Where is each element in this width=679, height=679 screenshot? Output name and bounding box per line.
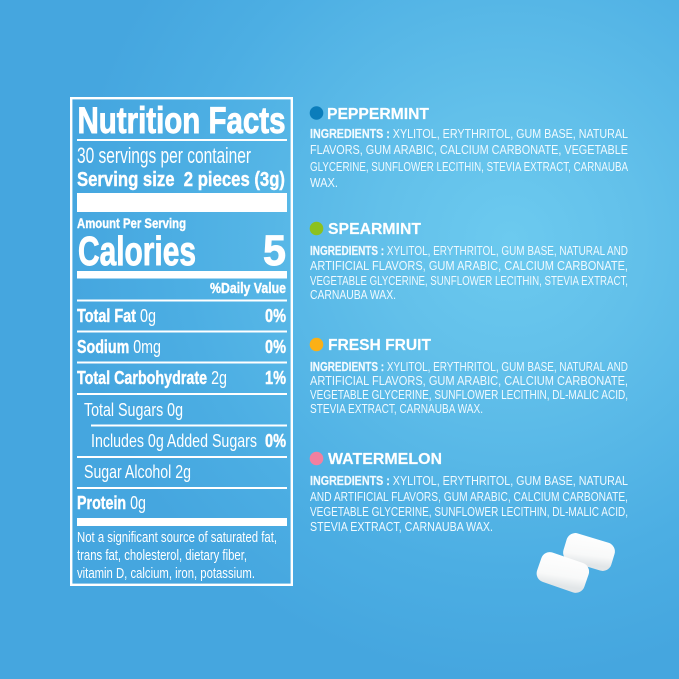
ingredients: spearmint: CARNAUBA WAX. (310, 288, 396, 302)
row: protein: Protein 0g (77, 493, 146, 513)
ingredients: fresh fruit: STEVIA EXTRACT, CARNAUBA WAX. (310, 402, 483, 416)
row: total carbohydrate: Total Carbohydrate 2g (77, 368, 227, 388)
ingredients: peppermint: FLAVORS, GUM ARABIC, CALCIUM CARBONATE, VEGETABLE (310, 143, 628, 157)
icon: fresh fruit dot (310, 338, 323, 351)
icon: spearmint dot (310, 222, 323, 235)
footnote: Not a significant source of saturated fat, (77, 529, 277, 546)
icon: watermelon dot (310, 452, 323, 465)
ingredients: watermelon: STEVIA EXTRACT, CARNAUBA WAX. (310, 520, 493, 534)
servings per container: 30 servings per container (77, 143, 251, 168)
footnote (77, 529, 277, 582)
footnote: vitamin D, calcium, iron, potassium. (77, 565, 255, 582)
ingredients: spearmint: ARTIFICIAL FLAVORS, GUM ARABIC, CALCIUM CARBONATE, (310, 259, 628, 273)
row: total fat (77, 306, 286, 326)
calories label: Calories (78, 228, 196, 274)
heading: watermelon: WATERMELON (328, 451, 442, 468)
row: total sugars: Total Sugars 0g (84, 400, 183, 420)
ingredients: peppermint: WAX. (310, 176, 338, 190)
icon: peppermint dot (310, 106, 323, 120)
amount per serving: Amount Per Serving (77, 215, 186, 231)
footnote: trans fat, cholesterol, dietary fiber, (77, 547, 247, 564)
section: fresh fruit (310, 337, 628, 416)
row: added sugars: Includes 0g Added Sugars (91, 431, 257, 451)
heading: fresh fruit: FRESH FRUIT (328, 337, 432, 354)
ingredients: fresh fruit: ARTIFICIAL FLAVORS, GUM ARABIC, CALCIUM CARBONATE, (310, 374, 628, 388)
ingredients: peppermint (310, 127, 628, 190)
row: sodium: 0% (265, 337, 286, 357)
image: two gum pieces (534, 531, 617, 595)
ingredients: fresh fruit (310, 360, 628, 416)
row: total fat: 0% (265, 306, 286, 326)
row: total fat: Total Fat 0g (77, 306, 156, 326)
panel: nutrition facts (71, 98, 292, 585)
ingredients: watermelon (310, 474, 628, 534)
heading: spearmint: SPEARMINT (328, 221, 422, 238)
ingredients: watermelon: INGREDIENTS : XYLITOL, ERYTHRITOL, GUM BASE, NATURAL (310, 474, 628, 488)
row: sugar alcohol: Sugar Alcohol 2g (84, 462, 191, 482)
calories value: 5 (263, 227, 286, 275)
heading: peppermint: PEPPERMINT (327, 106, 430, 123)
ingredients: spearmint (310, 244, 628, 302)
section: spearmint (310, 221, 628, 302)
heading: Nutrition Facts: Nutrition Facts (78, 100, 286, 141)
serving size: Serving size 2 pieces (3g) (77, 169, 285, 191)
daily value heading: %Daily Value (210, 280, 286, 297)
row: sodium: Sodium 0mg (77, 337, 161, 357)
row: added sugars: 0% (265, 431, 286, 451)
row: total carbohydrate: 1% (265, 368, 286, 388)
panel border (71, 98, 292, 585)
section: watermelon (310, 451, 628, 534)
section: peppermint (310, 106, 628, 190)
row: sodium (77, 337, 286, 357)
ingredients: peppermint: INGREDIENTS : XYLITOL, ERYTHRITOL, GUM BASE, NATURAL (310, 127, 628, 141)
